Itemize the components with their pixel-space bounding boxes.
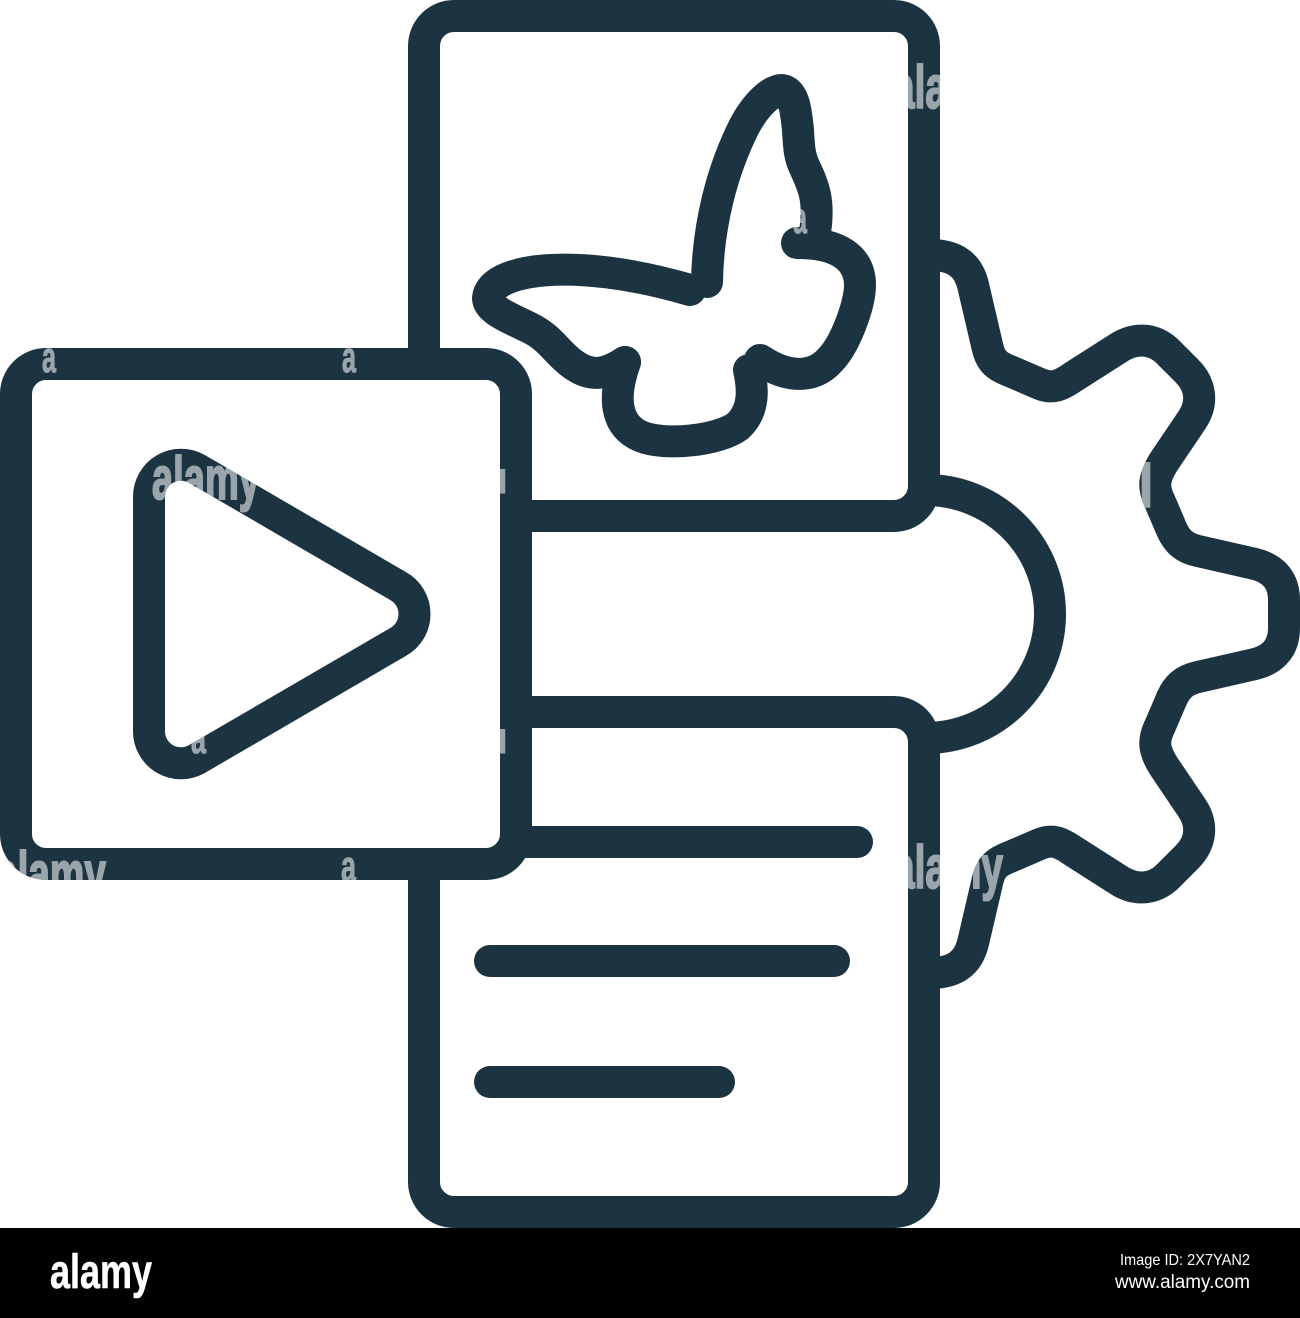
watermark fragments over the strokes: l bbox=[498, 464, 507, 500]
watermark fragments over the strokes: alamy bbox=[893, 834, 1003, 901]
watermark fragments over the strokes: a bbox=[341, 842, 356, 891]
icon: gear outline bbox=[930, 255, 1284, 973]
footer bar bbox=[0, 1228, 1300, 1318]
text line 1 bbox=[520, 826, 857, 858]
watermark fragments over the strokes: a bbox=[793, 194, 807, 243]
watermark fragments over the strokes: alamy bbox=[0, 840, 106, 907]
watermark fragments over the strokes: alamy bbox=[152, 445, 260, 512]
watermark fragments over the strokes: l bbox=[498, 724, 507, 760]
image id: Image ID: 2X7YAN2 bbox=[1120, 1252, 1250, 1269]
text line 3 bbox=[490, 1066, 719, 1098]
panel: bottom text card bbox=[424, 712, 924, 1212]
panel: top image card bbox=[424, 16, 924, 516]
footer logo: alamy bbox=[50, 1246, 152, 1299]
watermark fragments over the strokes bbox=[0, 54, 1153, 907]
watermark fragments over the strokes: a bbox=[42, 333, 56, 382]
watermark fragments over the strokes: l bbox=[1139, 453, 1153, 520]
watermark fragments over the strokes: a bbox=[191, 714, 206, 763]
watermark fragments over the strokes: a bbox=[342, 333, 356, 382]
panel: video card bbox=[16, 364, 516, 864]
icon: play triangle bbox=[149, 465, 415, 763]
website: www.alamy.com bbox=[1114, 1272, 1250, 1293]
text line 2 bbox=[490, 945, 834, 977]
watermark fragments over the strokes: alamy bbox=[893, 54, 1003, 121]
icon: half-circle hub bbox=[926, 490, 1050, 738]
icon: butterfly bbox=[488, 90, 860, 441]
